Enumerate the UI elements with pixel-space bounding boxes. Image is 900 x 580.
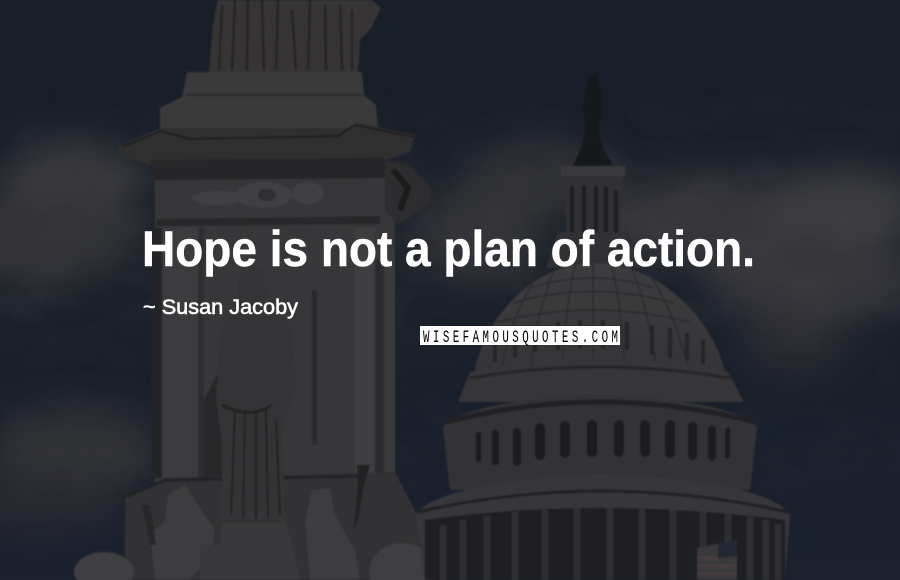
entablature and colonnade — [415, 474, 790, 580]
quote text: Hope is not a plan of action. — [142, 221, 755, 277]
drum with arched windows — [443, 394, 757, 490]
dome — [458, 263, 744, 402]
cherub figures and base — [74, 465, 437, 580]
pedestal shaft and cornice — [118, 72, 433, 530]
draped female statue — [216, 266, 296, 520]
background: dark cloudy sky — [0, 132, 900, 522]
monument: Peace Monument pedestal — [74, 0, 437, 580]
relief wreath frieze — [192, 182, 324, 208]
american flag — [697, 540, 737, 580]
author attribution: ~ Susan Jacoby — [143, 296, 299, 319]
statue of freedom and lantern — [572, 75, 613, 168]
lantern colonnade — [546, 166, 640, 268]
watermark: wisefamousquotes.com: WISEFAMOUSQUOTES.COM — [423, 329, 618, 348]
capitol building — [415, 75, 790, 580]
lower pedestal panels — [125, 228, 420, 580]
statue group at top of the pedestal — [209, 0, 381, 72]
